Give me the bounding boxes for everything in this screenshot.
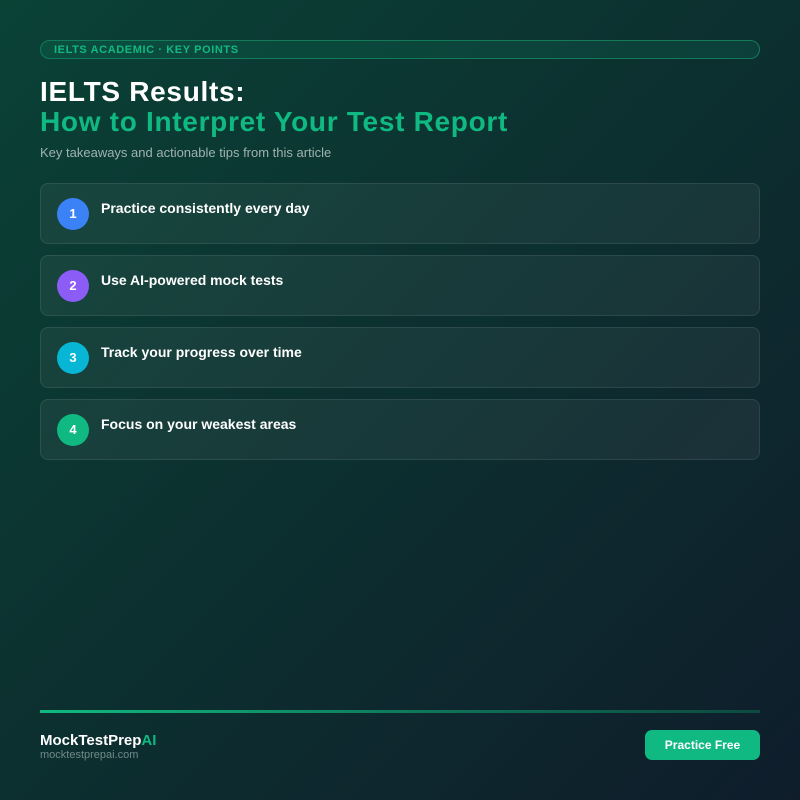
tag pill: [40, 40, 760, 59]
card 3: [40, 327, 760, 388]
brand: [40, 732, 156, 761]
brand: mocktestprepai.com: [40, 749, 138, 761]
title: How to Interpret Your Test Report: [40, 106, 508, 137]
card 1: 1: [69, 206, 77, 221]
brand: MockTestPrepAI: [40, 732, 156, 749]
subtitle: Key takeaways and actionable tips from this article: [40, 145, 331, 160]
title: [40, 76, 508, 137]
card 2: Use AI-powered mock tests: [101, 272, 283, 288]
card 4: Focus on your weakest areas: [101, 416, 296, 432]
CTA button: [645, 730, 760, 760]
card 4: [40, 399, 760, 460]
title: IELTS Results:: [40, 76, 245, 107]
card 1: [40, 183, 760, 244]
CTA button: Practice Free: [665, 738, 740, 752]
card 2: [40, 255, 760, 316]
card 3: Track your progress over time: [101, 344, 302, 360]
card 4: 4: [69, 422, 77, 437]
footer divider: [40, 710, 760, 713]
tag pill: IELTS ACADEMIC · KEY POINTS: [54, 44, 239, 56]
card 3: 3: [69, 350, 77, 365]
card 1: Practice consistently every day: [101, 200, 310, 216]
card 2: 2: [69, 278, 77, 293]
